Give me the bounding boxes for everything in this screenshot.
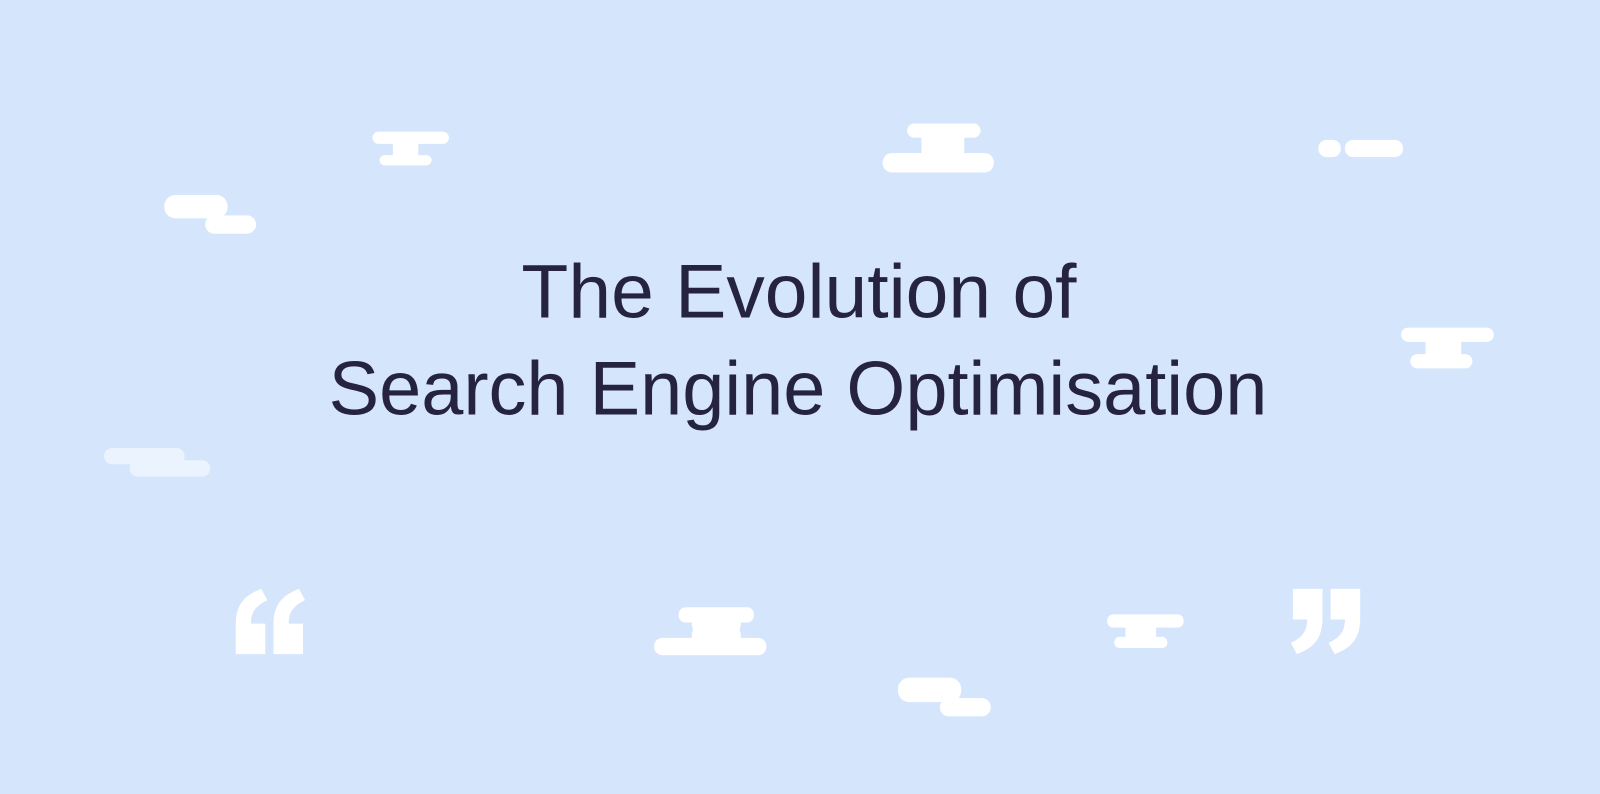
title: Search Engine Optimisation [329,346,1267,431]
title [329,249,1267,431]
cloud: top center [883,123,994,172]
cloud: bottom stacked [898,678,991,716]
cloud: bottom center [654,607,766,655]
cloud: top right [1318,140,1403,157]
title: The Evolution of [521,249,1077,334]
cloud: right [1401,328,1494,368]
cloud: bottom right small [1107,614,1184,648]
icon: opening quote [236,589,305,654]
cloud: left faded [104,448,210,477]
cloud: top left small [372,132,449,165]
icon: closing quote [1291,589,1360,654]
cloud: left stacked [164,195,256,234]
